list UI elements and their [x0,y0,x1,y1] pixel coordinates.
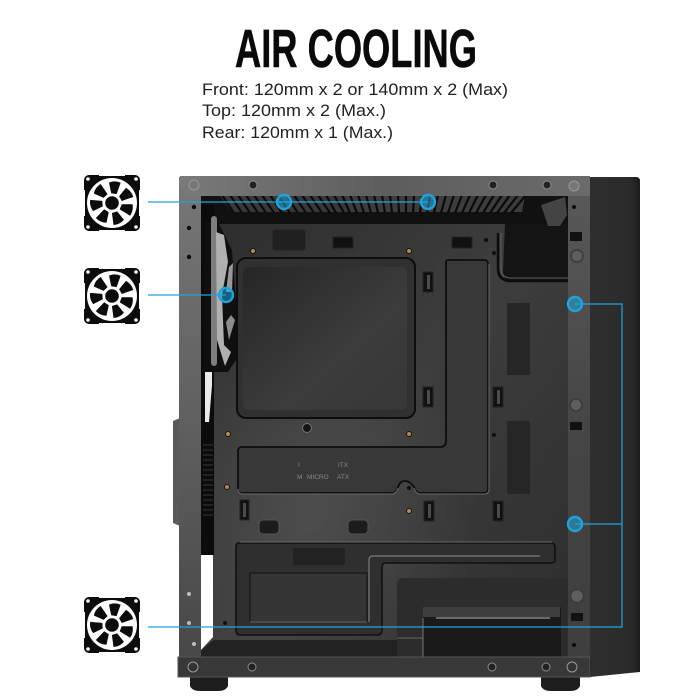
front opening: mesh column [200,205,214,555]
motherboard labels: MICRO [307,474,329,481]
title: AIR COOLING [235,19,477,79]
fan icon: top [84,174,140,232]
frame screws [248,181,551,671]
callout markers [219,195,582,531]
drive cage [423,607,561,658]
motherboard labels: ATX [337,474,350,481]
white sliver [205,372,212,422]
fan icon: rear [84,596,140,654]
foot: left [190,675,228,691]
lower stepped recess [236,543,555,635]
top vent [200,195,570,224]
case frame [178,176,640,677]
top rail [180,176,590,196]
left rail [179,177,201,677]
small clips [240,230,503,534]
right rail [568,196,590,677]
frame holes [187,205,576,647]
motherboard labels [297,462,350,481]
motherboard labels: I [298,462,300,469]
grommets [570,250,584,602]
text block: fan specifications: Top: 120mm x 2 (Max.) [202,102,386,120]
motherboard labels: M [297,474,302,481]
text block: fan specifications: Front: 120mm x 2 or 140mm x 2 (Max) [202,81,508,99]
corner screws [188,180,579,672]
motherboard labels: ITX [338,462,349,469]
white gap at lower front [201,555,213,650]
front fan [204,216,236,372]
text block: fan specifications [202,81,508,142]
fan icon: front [84,268,140,324]
top right cable area [503,224,568,280]
text block: fan specifications: Rear: 120mm x 1 (Max.) [202,124,393,142]
back panel [198,192,570,660]
main square recess [237,258,415,418]
bottom rail [178,657,590,677]
rail cutouts [570,232,583,621]
panel screw [302,424,312,432]
left side tab [173,418,180,526]
screws on panel [223,238,496,625]
front panel [590,177,640,677]
vertical slots [507,303,530,375]
callout lines [148,202,622,627]
PC case interior [173,192,580,691]
L-shaped recess [238,260,488,493]
bottom mesh [201,640,397,658]
lower right bay [397,578,568,658]
brass standoffs [224,248,412,514]
foot: right [541,675,580,691]
